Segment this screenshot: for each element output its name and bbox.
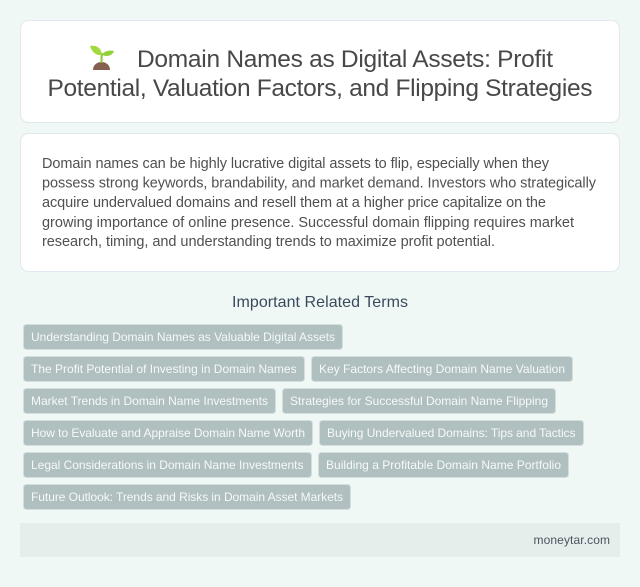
tag xyxy=(312,356,572,382)
footer source text: moneytar.com xyxy=(534,533,610,547)
title xyxy=(48,46,592,102)
tag xyxy=(24,356,304,382)
tag list xyxy=(24,324,584,510)
tag xyxy=(24,420,312,446)
icon: seedling xyxy=(90,46,114,70)
panel: header xyxy=(20,20,620,122)
tag: Buying Undervalued Domains: Tips and Tactics xyxy=(327,426,576,440)
footer xyxy=(20,523,620,557)
tag: Strategies for Successful Domain Name Flipping xyxy=(290,394,548,408)
tag: Building a Profitable Domain Name Portfolio xyxy=(326,458,561,472)
tag: Future Outlook: Trends and Risks in Domain Asset Markets xyxy=(31,490,343,504)
title: Domain Names as Digital Assets: Profit xyxy=(137,46,553,73)
tag xyxy=(24,452,312,478)
text block: description xyxy=(42,156,597,250)
text block: description: Domain names can be highly lucrative digital assets to flip, especially when they xyxy=(42,156,550,172)
text block: description: acquire undervalued domains and resell them at a higher price capitalize on the xyxy=(42,195,546,211)
heading: related terms: Important Related Terms xyxy=(232,294,408,311)
tag xyxy=(24,484,350,510)
title: Potential, Valuation Factors, and Flipping Strategies xyxy=(48,75,592,102)
tag xyxy=(320,420,584,446)
tag: Understanding Domain Names as Valuable Digital Assets xyxy=(31,330,335,344)
tag xyxy=(24,388,276,414)
tag: The Profit Potential of Investing in Domain Names xyxy=(31,362,296,376)
tag xyxy=(318,452,568,478)
tag: How to Evaluate and Appraise Domain Name Worth xyxy=(31,426,305,440)
text block: description: growing importance of online presence. Successful domain flipping requires market xyxy=(42,215,574,231)
tag: Market Trends in Domain Name Investments xyxy=(31,394,268,408)
tag: Legal Considerations in Domain Name Investments xyxy=(31,458,304,472)
text block: description: research, timing, and understanding trends to maximize profit potential. xyxy=(42,234,495,250)
tag: Key Factors Affecting Domain Name Valuation xyxy=(319,362,565,376)
panel: description xyxy=(20,134,620,272)
text block: description: possess strong keywords, brandability, and market demand. Investors who strategically xyxy=(42,176,597,192)
tag xyxy=(24,324,342,350)
tag xyxy=(282,388,556,414)
